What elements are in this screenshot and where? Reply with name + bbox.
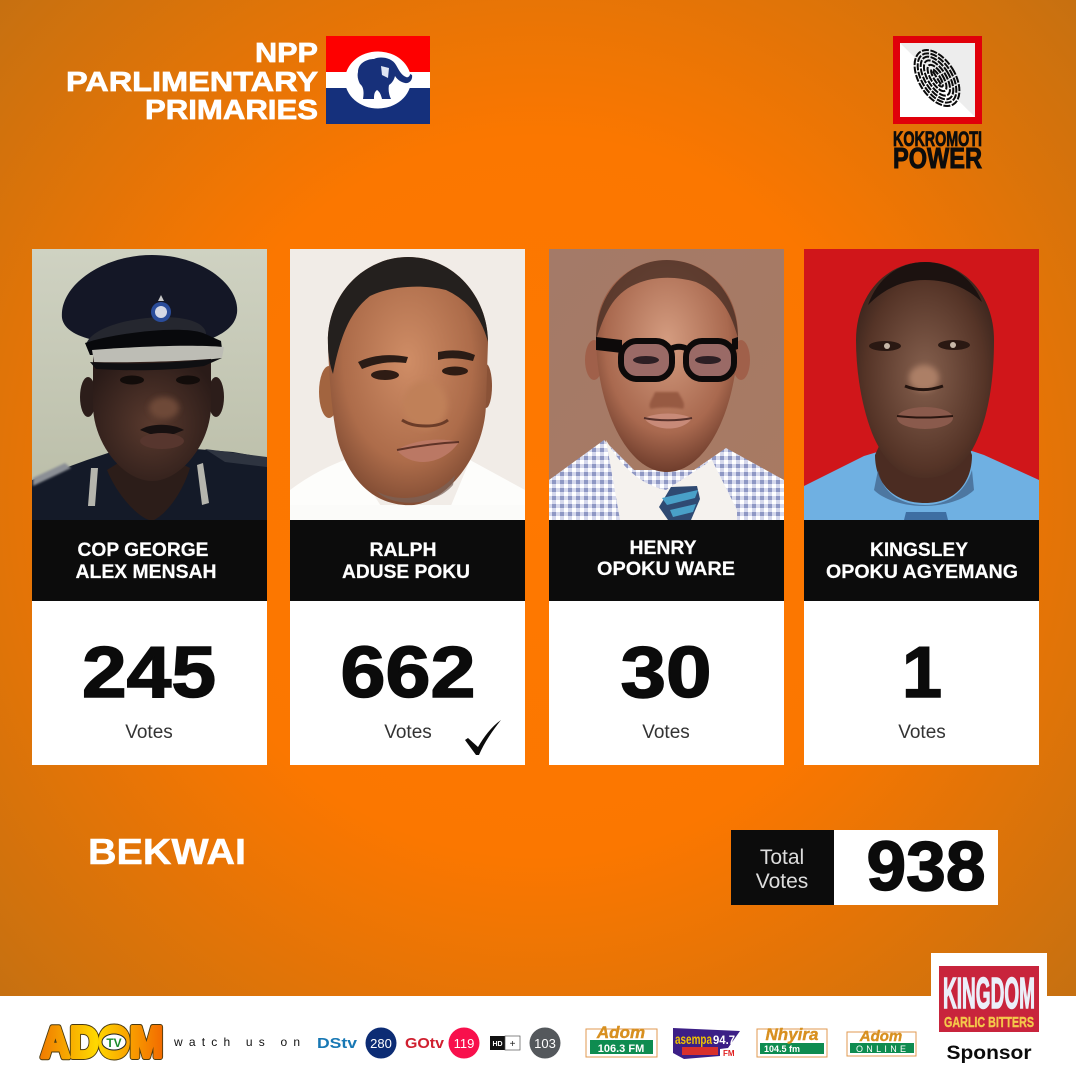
- vote count: 245: [82, 633, 216, 713]
- logo: Kokromoti Power fingerprint: KOKROMOTI: [893, 128, 982, 151]
- logo: Asempa 94.7 FM: asempa: [675, 1031, 712, 1047]
- title: NPP Parlimentary Primaries: NPP: [255, 37, 318, 68]
- name: KINGSLEY: [870, 540, 968, 561]
- logo: Adom Online: Adom: [859, 1028, 902, 1045]
- name: [342, 540, 470, 583]
- name: [826, 540, 1018, 583]
- logo: Adom Online: [847, 1028, 916, 1056]
- logo: Adom 106.3 FM: Adom: [596, 1023, 645, 1042]
- sponsor block: Kingdom Garlic Bitters: Sponsor: [946, 1043, 1032, 1064]
- sponsor block: Kingdom Garlic Bitters: [931, 953, 1047, 1080]
- footer bar: [0, 996, 1076, 1080]
- votes panel: [804, 601, 1039, 765]
- logo: Adom TV: TV: [106, 1036, 122, 1050]
- name bar: [32, 520, 267, 601]
- photo: man on red background: [804, 249, 1039, 520]
- watch us on: watch us on: [173, 1035, 300, 1049]
- votes label: Votes: [384, 722, 432, 743]
- channel: DStv 280: 280: [370, 1036, 392, 1051]
- vote count: 662: [340, 633, 476, 713]
- name: RALPH: [370, 540, 436, 561]
- channel: DStv 280: DStv: [317, 1035, 358, 1052]
- logo: Kokromoti Power fingerprint: [893, 36, 982, 175]
- name: COP GEORGE: [78, 540, 208, 561]
- channel: DStv 280: [317, 1028, 396, 1058]
- logo: Adom TV: ADOM: [41, 1018, 163, 1067]
- channel: HD+ 103: [490, 1028, 560, 1058]
- channel: GOtv 119: 119: [454, 1036, 474, 1051]
- panel: candidate Kingsley Opoku Agyemang: [804, 249, 1039, 765]
- name: OPOKU WARE: [597, 559, 735, 580]
- votes panel: [32, 601, 267, 765]
- logo: Kokromoti Power fingerprint: POWER: [893, 143, 982, 175]
- logo: Adom Online: ONLINE: [856, 1044, 906, 1054]
- name bar: [290, 520, 525, 601]
- constituency heading: BEKWAI: [88, 831, 246, 872]
- name: OPOKU AGYEMANG: [826, 562, 1018, 583]
- name: HENRY: [630, 538, 697, 559]
- panel: candidate Ralph Aduse Poku: [290, 249, 525, 765]
- votes panel: [290, 601, 525, 765]
- channel: HD+ 103: HD: [492, 1041, 503, 1048]
- total votes box: Total: [760, 846, 804, 869]
- channel: HD+ 103: 103: [534, 1036, 556, 1051]
- name bar: [549, 520, 784, 601]
- logo: Asempa 94.7 FM: 94.7: [713, 1033, 735, 1047]
- photo: police officer in cap: [32, 249, 267, 520]
- name: [597, 538, 735, 580]
- panel: candidate Henry Opoku Ware: [549, 249, 784, 765]
- vote count: 30: [620, 633, 712, 713]
- logo: Asempa 94.7 FM: [673, 1028, 740, 1059]
- vote count: 1: [902, 633, 942, 713]
- channel: GOtv 119: GOtv: [405, 1035, 445, 1052]
- logo: Adom TV: ADOM: [41, 1018, 163, 1067]
- logo: Adom 106.3 FM: 106.3 FM: [598, 1043, 644, 1055]
- votes label: Votes: [125, 722, 173, 743]
- name: [76, 540, 216, 583]
- votes panel: [549, 601, 784, 765]
- channel: HD+ 103: +: [510, 1039, 516, 1050]
- title: NPP Parlimentary Primaries: PARLIMENTARY: [66, 66, 318, 97]
- title: NPP Parlimentary Primaries: PRIMARIES: [145, 94, 318, 125]
- name: ADUSE POKU: [342, 562, 470, 583]
- channel: GOtv 119: [405, 1028, 480, 1058]
- title: NPP Parlimentary Primaries: [66, 37, 318, 125]
- votes label: Votes: [642, 722, 690, 743]
- logo: Nhyira 104.5 FM: Nhyira: [766, 1025, 818, 1044]
- logo: NPP flag with elephant: [326, 36, 430, 124]
- panel: candidate Cop George Alex Mensah: [32, 249, 267, 765]
- total votes box: 938: [866, 827, 986, 905]
- total votes box: Votes: [756, 870, 808, 893]
- sponsor block: Kingdom Garlic Bitters: GARLIC BITTERS: [944, 1014, 1034, 1031]
- logo: Asempa 94.7 FM: FM: [723, 1049, 735, 1058]
- photo: man in glasses: [549, 249, 784, 520]
- logo: Nhyira 104.5 FM: 104.5 fm: [764, 1044, 800, 1054]
- votes label: Votes: [898, 722, 946, 743]
- photo: man in white shirt: [290, 249, 525, 520]
- logo: Nhyira 104.5 FM: [757, 1025, 827, 1057]
- name bar: [804, 520, 1039, 601]
- logo: Adom 106.3 FM: [586, 1023, 657, 1057]
- icon: winner check mark: [465, 720, 501, 755]
- name: ALEX MENSAH: [76, 562, 216, 583]
- total votes box: [731, 827, 998, 905]
